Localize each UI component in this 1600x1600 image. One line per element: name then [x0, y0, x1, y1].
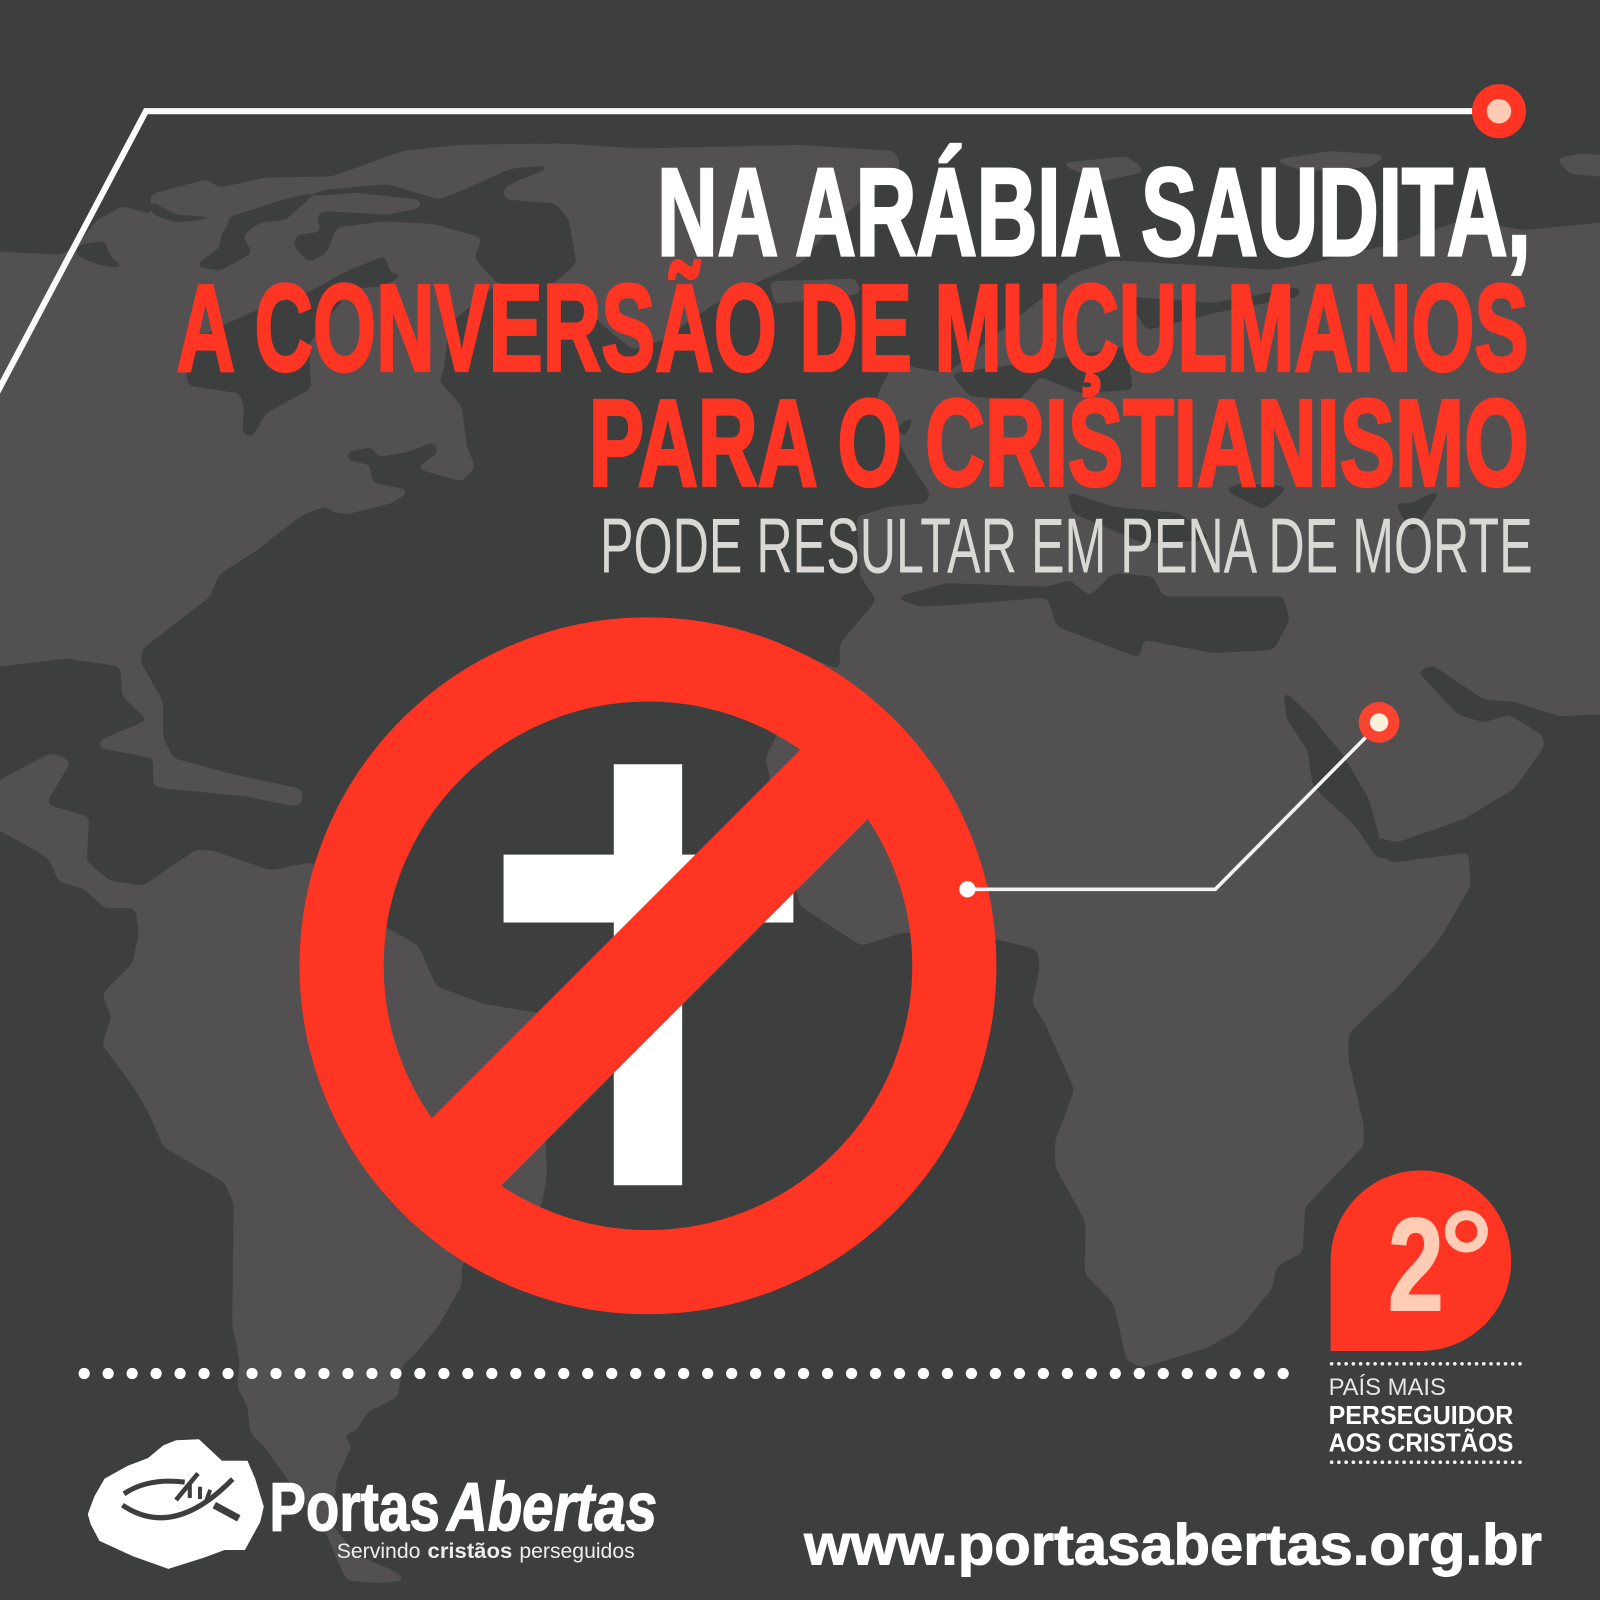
- title: [177, 143, 1531, 513]
- seas: Baltic, Mediterranean, Black, Caspian and Red Sea: [893, 287, 1443, 860]
- ranking caption: PAÍS MAIS: [1329, 1374, 1446, 1401]
- icon: top pin marker: [1472, 84, 1526, 138]
- land: Central and South America: [0, 753, 547, 1583]
- land: Europe, Africa and Asia: [765, 151, 1600, 1368]
- ranking caption: [1329, 1364, 1521, 1462]
- top frame line: [0, 111, 1499, 395]
- seas: Arctic channels, Baffin and Hudson bays: [77, 164, 577, 437]
- icon: stone with fish: [88, 1439, 264, 1569]
- ranking caption: AOS CRISTÃOS: [1329, 1428, 1513, 1458]
- logo tagline: perseguidos: [519, 1539, 635, 1563]
- badge number: 2: [1388, 1191, 1444, 1339]
- prohibition slash: [411, 730, 889, 1207]
- logo tagline: Servindo: [337, 1539, 420, 1563]
- logo: Portas Abertas: [88, 1439, 657, 1569]
- dotted divider: [84, 1368, 1285, 1379]
- badge degree sign: °: [1439, 1182, 1494, 1336]
- islands: Arctic and Iceland: [769, 151, 1600, 304]
- ranking caption: PERSEGUIDOR: [1329, 1402, 1513, 1430]
- logo: Portas Abertas: Abertas: [445, 1470, 657, 1546]
- icon: prohibited cross sign: [342, 659, 954, 1272]
- logo tagline: cristãos: [428, 1539, 512, 1563]
- land: North America and Greenland: [0, 143, 901, 807]
- logo name: Portas: [269, 1470, 440, 1546]
- ranking badge: [1331, 1170, 1511, 1351]
- cross: [504, 764, 793, 1185]
- callout pointer to Saudi Arabia: [959, 702, 1399, 897]
- website URL: www.portasabertas.org.br: [803, 1513, 1542, 1577]
- badge teardrop: [1331, 1170, 1511, 1351]
- prohibition ring: [342, 659, 954, 1272]
